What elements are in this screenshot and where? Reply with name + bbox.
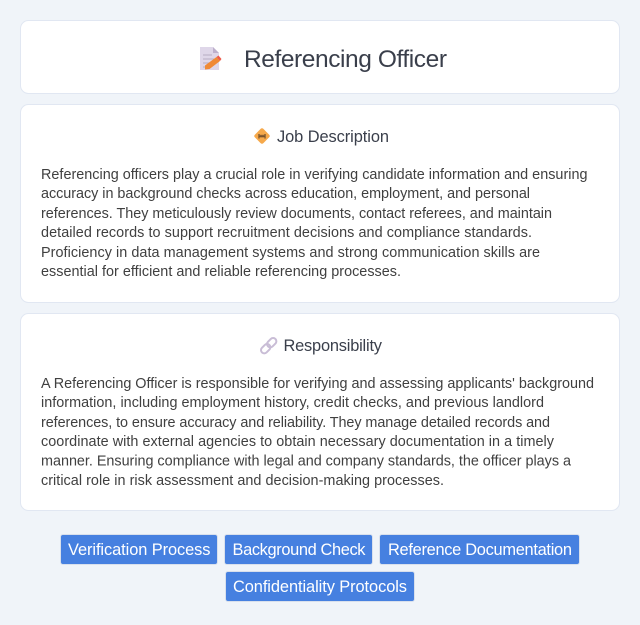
- heading: Responsibility: Responsibility: [284, 337, 383, 355]
- heading: Referencing Officer: Referencing Officer: [244, 46, 447, 73]
- icon: document with pencil: [200, 47, 222, 70]
- text block: job description: accuracy in background checks across education, employment, and personal: [41, 186, 530, 202]
- icon: orange diamond sign: [254, 128, 270, 144]
- panel: title: [20, 20, 620, 94]
- text block: responsibility: references, to ensure accuracy and reliability. They manage detailed records and: [41, 415, 550, 431]
- tag: Confidentiality Protocols: Confidentiality Protocols: [233, 578, 407, 596]
- tag: Verification Process: Verification Process: [68, 541, 210, 559]
- panel: responsibility: [20, 314, 620, 510]
- tag: Reference Documentation: [380, 534, 580, 564]
- text block: job description: essential for efficient and reliable referencing processes.: [41, 264, 401, 280]
- icon: chain link: [260, 337, 278, 355]
- text block: job description: references. They meticulously review documents, contact referees, and maintain: [41, 206, 552, 222]
- text block: responsibility: A Referencing Officer is responsible for verifying and assessing applicants' background: [41, 376, 594, 392]
- text block: job description: detailed records to support recruitment decisions and compliance standards.: [41, 225, 532, 241]
- tag: Reference Documentation: Reference Documentation: [388, 541, 572, 559]
- heading: Job Description: Job Description: [277, 128, 389, 146]
- text block: job description: [41, 167, 588, 280]
- panel: job description: [20, 104, 620, 302]
- text block: responsibility: critical role in risk assessment and decision-making processes.: [41, 473, 444, 489]
- text block: job description: Referencing officers play a crucial role in verifying candidate information and ensuring: [41, 167, 588, 183]
- text block: job description: Proficiency in data management systems and strong communication skills are: [41, 245, 540, 261]
- text block: responsibility: manner. Ensuring compliance with legal and company standards, the officer plays a: [41, 454, 571, 470]
- text block: responsibility: coordinate with external agencies to obtain necessary documentation in a timely: [41, 434, 555, 450]
- tag: Background Check: Background Check: [232, 541, 366, 559]
- text block: responsibility: [41, 376, 594, 489]
- text block: responsibility: information, including employment history, credit checks, and previous landlord: [41, 395, 544, 411]
- tag: Verification Process: [60, 534, 218, 564]
- tag: Background Check: [224, 534, 372, 564]
- tag: Confidentiality Protocols: [226, 572, 414, 602]
